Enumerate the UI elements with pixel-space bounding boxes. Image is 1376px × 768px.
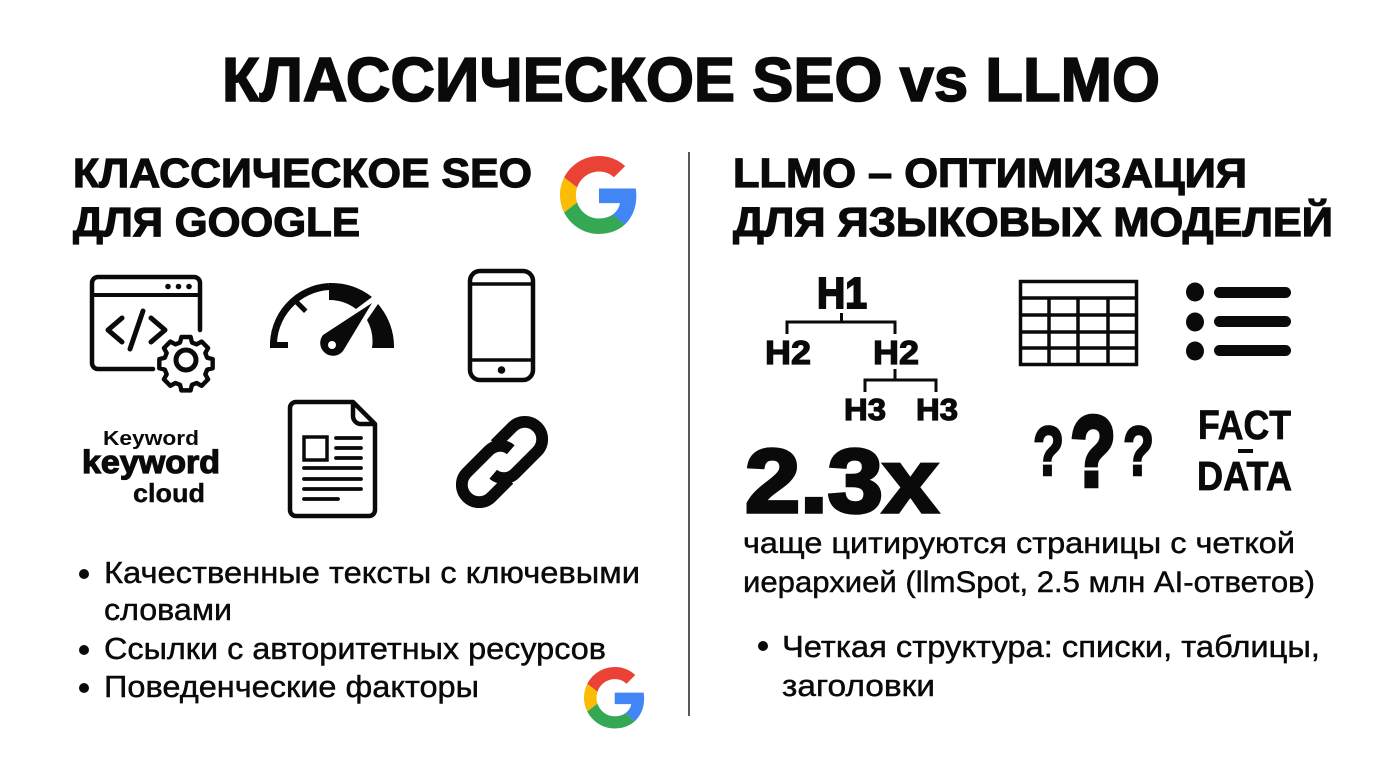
- icon: fact and data: [1197, 402, 1292, 499]
- stat: 2.3x: 2.3x: [745, 432, 938, 532]
- stat description: [743, 527, 1315, 599]
- bullet list: LLMO structure: [758, 629, 1320, 703]
- panel: LLMO: [733, 150, 1333, 703]
- icon: table: [1020, 282, 1137, 365]
- icon: Google logo small: [584, 667, 644, 728]
- stat description: иерархией (llmSpot, 2.5 млн AI-ответов): [743, 566, 1315, 599]
- bullet list: classic SEO factors: Качественные тексты с ключевыми: [104, 555, 640, 590]
- icon: keyword cloud: [82, 428, 220, 508]
- heading: LLMO optimization for language models: LLMO – ОПТИМИЗАЦИЯ: [733, 150, 1247, 196]
- panel: classic SEO: [73, 150, 644, 728]
- title: КЛАССИЧЕСКОЕ SEO vs LLMO: [222, 46, 1160, 115]
- diagram: heading hierarchy: H3: [844, 392, 886, 427]
- icon: browser code window with gear: [92, 277, 213, 390]
- heading: LLMO optimization for language models: [733, 150, 1333, 245]
- bullet list: classic SEO factors: Ссылки с авторитетных ресурсов: [104, 631, 606, 666]
- heading: LLMO optimization for language models: ДЛЯ ЯЗЫКОВЫХ МОДЕЛЕЙ: [733, 199, 1333, 245]
- diagram: heading hierarchy: H2: [873, 334, 919, 371]
- icon: question marks: ?: [1033, 412, 1064, 490]
- bullet list: LLMO structure: Четкая структура: списки, таблицы,: [782, 629, 1320, 664]
- bullet list: classic SEO factors: Поведенческие факторы: [104, 669, 479, 704]
- heading: classic SEO for Google: [73, 150, 532, 245]
- icon: keyword cloud: cloud: [133, 478, 205, 508]
- icon: Google logo large: [560, 156, 636, 234]
- heading: classic SEO for Google: ДЛЯ GOOGLE: [73, 199, 360, 245]
- stat description: чаще цитируются страницы с четкой: [743, 527, 1295, 560]
- icon: document: [290, 402, 375, 516]
- icon: keyword cloud: Keyword: [103, 428, 199, 450]
- icon: speedometer: [271, 283, 394, 356]
- bullet list: classic SEO factors: словами: [104, 592, 232, 627]
- icon: question marks: [1033, 396, 1154, 508]
- icon: question marks: ?: [1070, 396, 1116, 508]
- icon: question marks: ?: [1123, 412, 1154, 490]
- bullet list: classic SEO factors: [79, 555, 640, 704]
- icon: fact and data: FACT: [1198, 402, 1291, 448]
- diagram: heading hierarchy: H3: [916, 392, 958, 427]
- heading: classic SEO for Google: КЛАССИЧЕСКОЕ SEO: [73, 150, 532, 196]
- icon: list: [1186, 282, 1291, 360]
- icon: chain link: [455, 415, 549, 509]
- diagram: heading hierarchy: H2: [765, 334, 811, 371]
- icon: keyword cloud: keyword: [82, 444, 220, 480]
- icon: fact and data: DATA: [1197, 453, 1292, 499]
- diagram: heading hierarchy: [765, 269, 958, 427]
- diagram: heading hierarchy: H1: [817, 269, 867, 318]
- bullet list: LLMO structure: заголовки: [782, 668, 935, 703]
- icon: smartphone: [470, 271, 533, 380]
